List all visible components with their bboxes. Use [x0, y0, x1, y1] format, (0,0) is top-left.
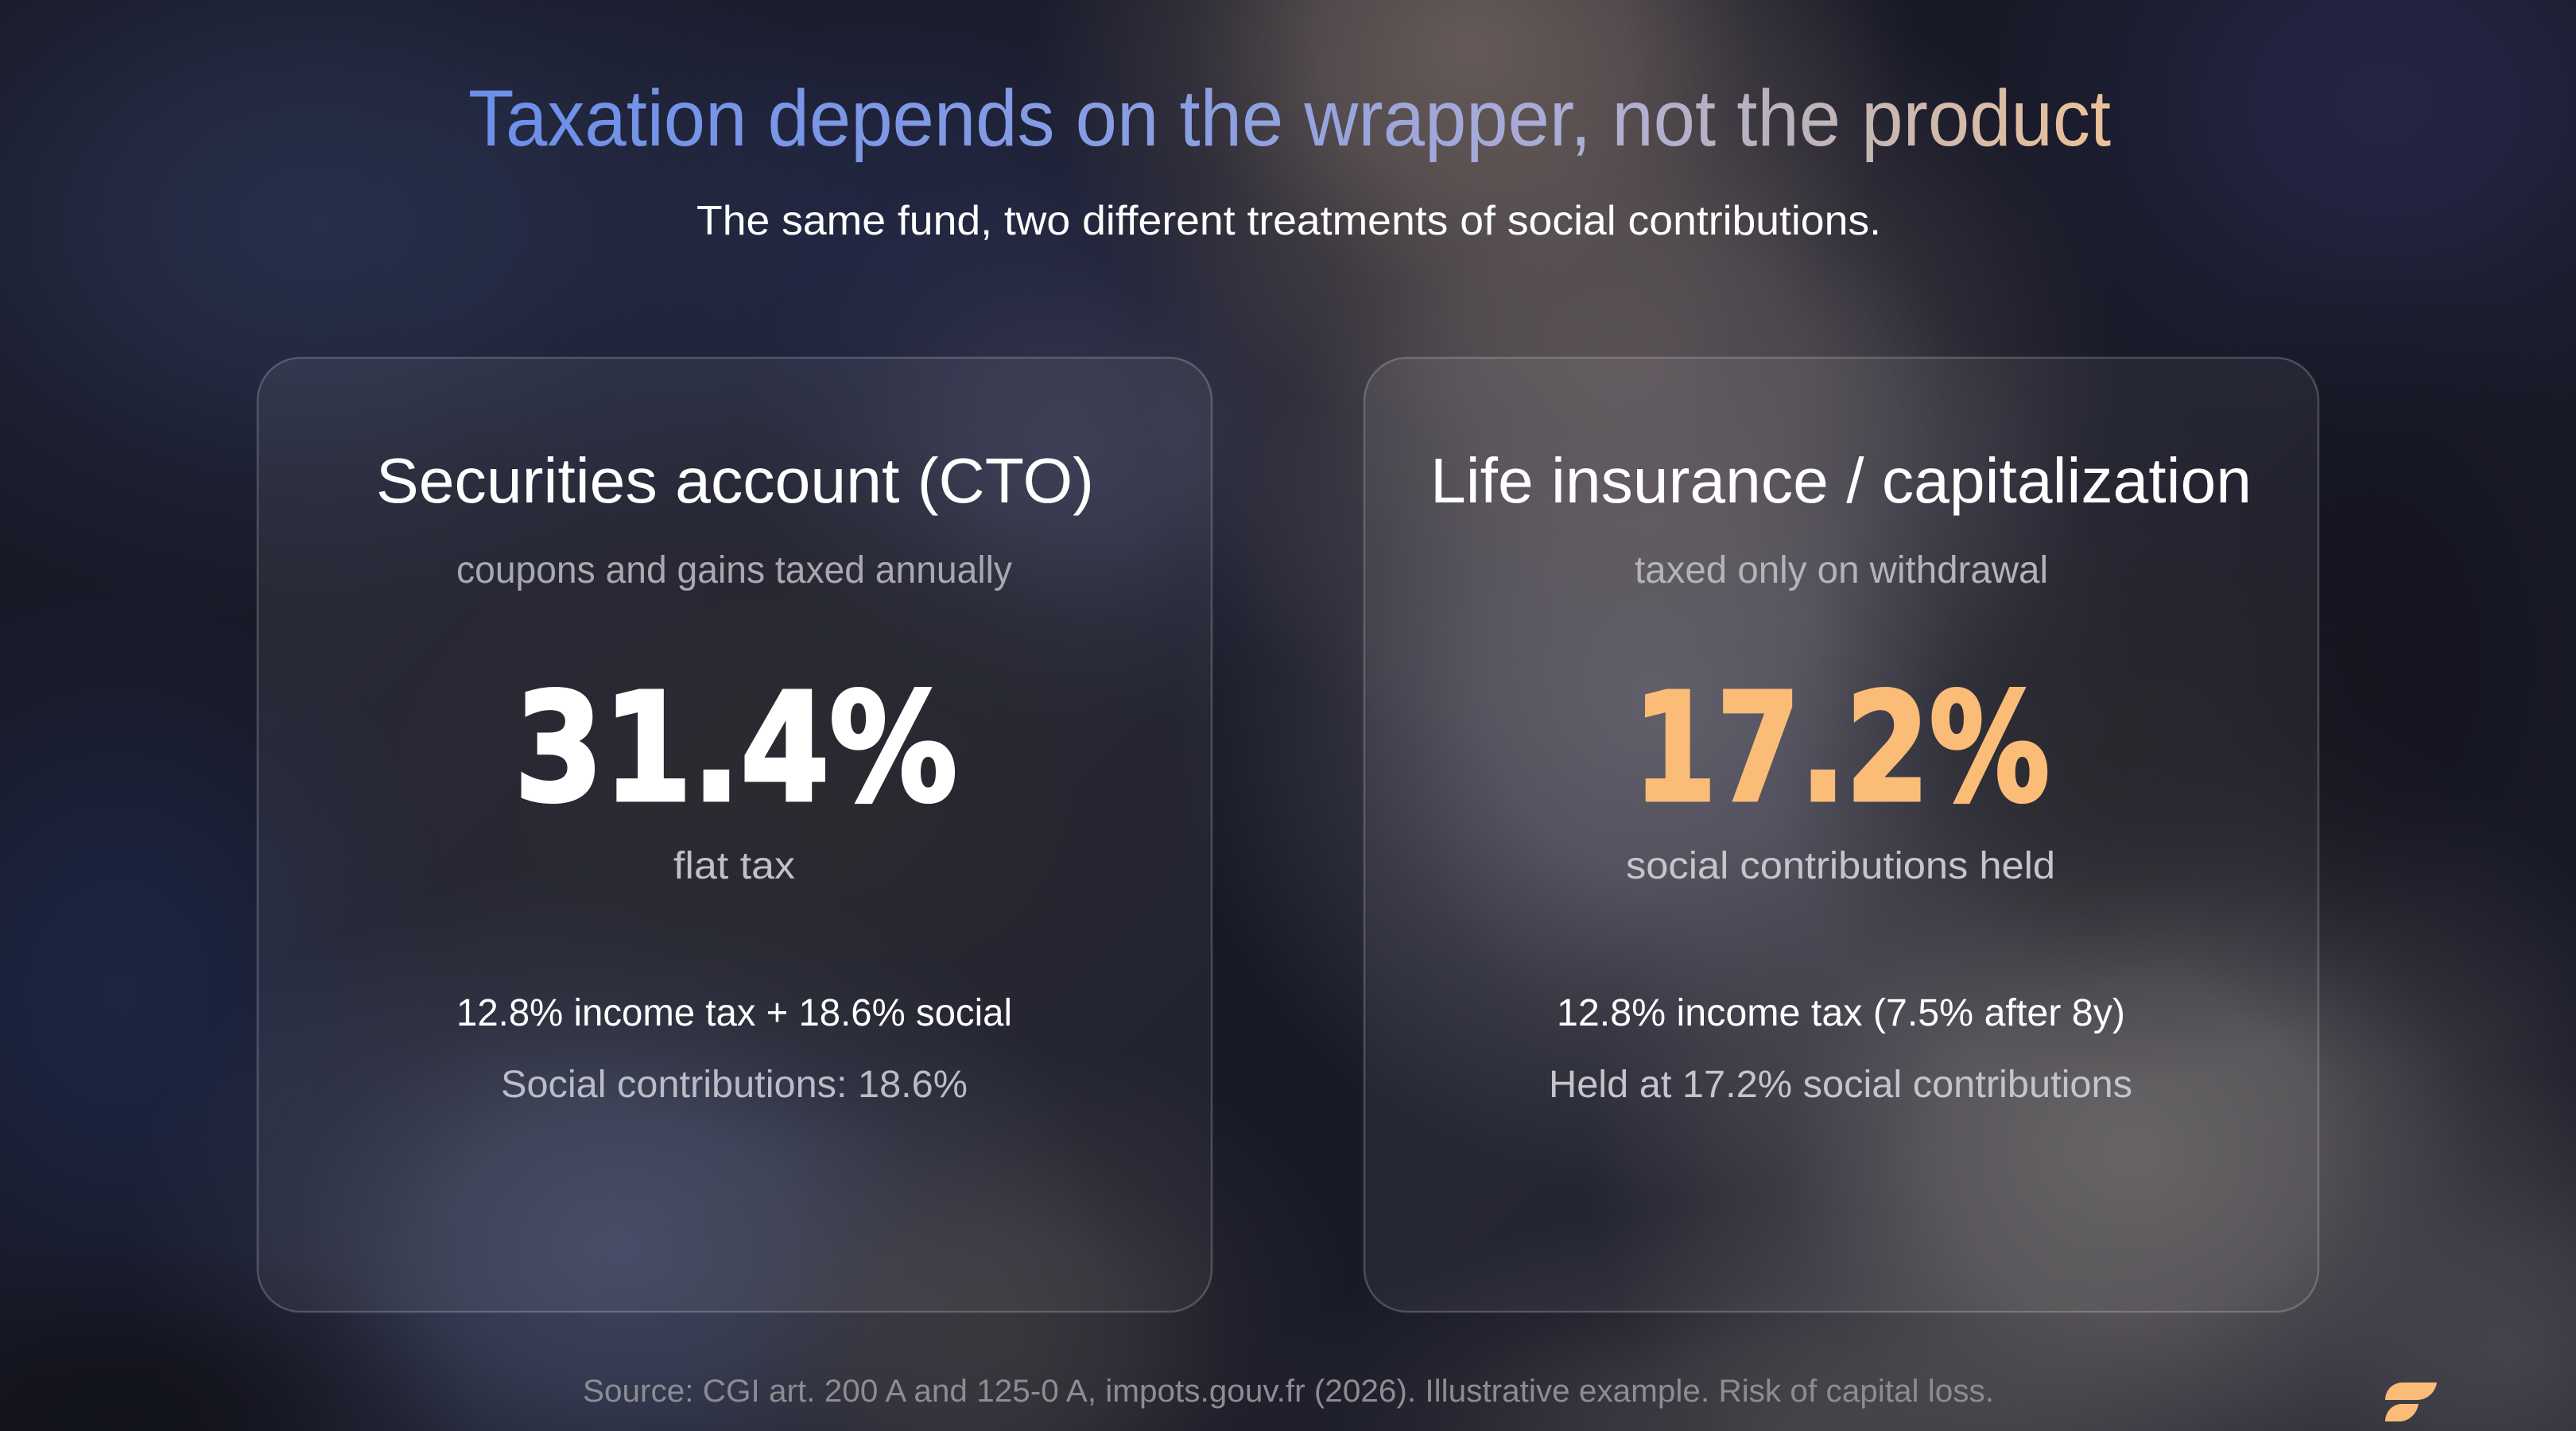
detail line 1: 12.8% income tax (7.5% after 8y)	[1557, 992, 2125, 1034]
card heading: Life insurance / capitalization	[1430, 445, 2252, 516]
panel: life insurance	[1364, 358, 2318, 1312]
panel: securities account	[258, 358, 1212, 1312]
card background	[258, 358, 1212, 1312]
source note: Source: CGI art. 200 A and 125-0 A, impots.gouv.fr (2026). Illustrative example. Risk of capital loss.	[583, 1374, 1994, 1409]
card description: coupons and gains taxed annually	[456, 549, 1012, 591]
icon: logo	[2385, 1383, 2437, 1421]
detail line 2: Social contributions: 18.6%	[501, 1064, 968, 1106]
big number: 17.2%	[1633, 661, 2050, 836]
card background	[1364, 358, 2318, 1312]
big number: 31.4%	[514, 661, 957, 836]
number label: social contributions held	[1626, 845, 2055, 887]
number label: flat tax	[673, 845, 795, 887]
title: Taxation depends on the wrapper, not the product	[468, 74, 2111, 163]
subtitle: The same fund, two different treatments of social contributions.	[696, 198, 1881, 244]
detail line 2: Held at 17.2% social contributions	[1549, 1064, 2132, 1106]
card description: taxed only on withdrawal	[1635, 549, 2048, 591]
card heading: Securities account (CTO)	[376, 445, 1094, 516]
detail line 1: 12.8% income tax + 18.6% social	[456, 992, 1012, 1034]
